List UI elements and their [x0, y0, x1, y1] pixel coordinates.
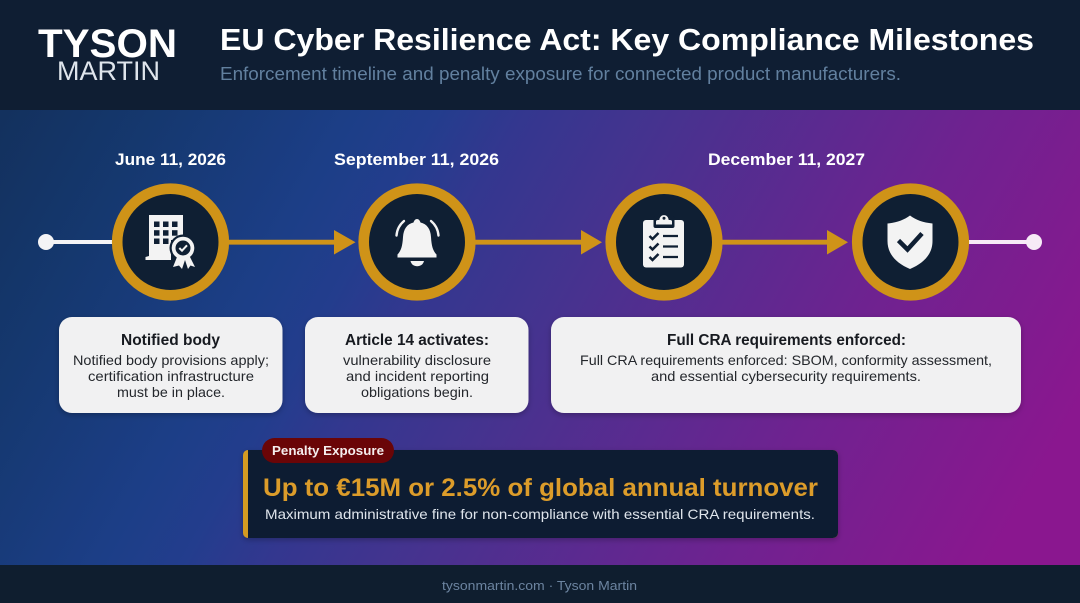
footer band	[0, 565, 1080, 603]
icon: bell	[396, 219, 438, 266]
header band	[0, 0, 1080, 110]
penalty badge	[262, 438, 394, 463]
logo	[38, 22, 177, 86]
milestone dates: September 11, 2026	[334, 150, 499, 169]
milestone dates	[115, 150, 865, 169]
milestone dates: December 11, 2027	[708, 150, 865, 169]
title: EU Cyber Resilience Act: Key Compliance Milestones	[220, 22, 1034, 57]
icon: rosette badge	[170, 234, 196, 269]
callout panel	[243, 450, 838, 538]
penalty badge: Penalty Exposure	[272, 443, 384, 458]
icon: clipboard	[643, 215, 684, 268]
milestone node 1: building with certificate	[117, 189, 224, 295]
card 3: full CRA requirements: Full CRA requirements enforced:	[667, 332, 906, 349]
logo: TYSON	[38, 22, 177, 66]
card 3: full CRA requirements: Full CRA requirements enforced: SBOM, conformity assessment,	[580, 352, 992, 368]
callout: penalty exposure	[243, 438, 838, 538]
card 1: notified body: certification infrastructure	[88, 368, 254, 384]
arrow 2	[475, 230, 602, 254]
penalty amount: Up to €15M or 2.5% of global annual turnover	[263, 474, 818, 502]
card 1: notified body: Notified body provisions apply;	[73, 352, 269, 368]
icon: shield with check	[888, 216, 932, 269]
card 3: full CRA requirements	[551, 317, 1021, 413]
card 2: article 14: obligations begin.	[361, 384, 473, 400]
arrow 3	[721, 230, 848, 254]
card 1: notified body: Notified body	[121, 332, 220, 349]
main gradient background	[0, 110, 1080, 565]
logo: MARTIN	[57, 56, 160, 86]
card 1: notified body	[59, 317, 282, 413]
milestone node 3: checklist	[611, 189, 717, 295]
card 1: notified body: must be in place.	[117, 384, 225, 400]
milestone node 2: bell	[364, 189, 470, 295]
timeline start line	[38, 234, 114, 250]
milestone dates: June 11, 2026	[115, 150, 226, 169]
card 2: article 14: and incident reporting	[346, 368, 489, 384]
subtitle: Enforcement timeline and penalty exposure for connected product manufacturers.	[220, 64, 901, 84]
arrow 1	[228, 230, 356, 254]
icon: building	[146, 215, 183, 260]
card 2: article 14: vulnerability disclosure	[343, 352, 491, 368]
footer band: tysonmartin.com · Tyson Martin	[442, 578, 637, 593]
penalty description: Maximum administrative fine for non-compliance with essential CRA requirements.	[265, 506, 815, 522]
card 2: article 14	[305, 317, 528, 413]
card 3: full CRA requirements: and essential cybersecurity requirements.	[651, 368, 921, 384]
card 2: article 14: Article 14 activates:	[345, 332, 489, 349]
milestone node 4: shield	[857, 189, 964, 295]
timeline end line	[967, 234, 1042, 250]
